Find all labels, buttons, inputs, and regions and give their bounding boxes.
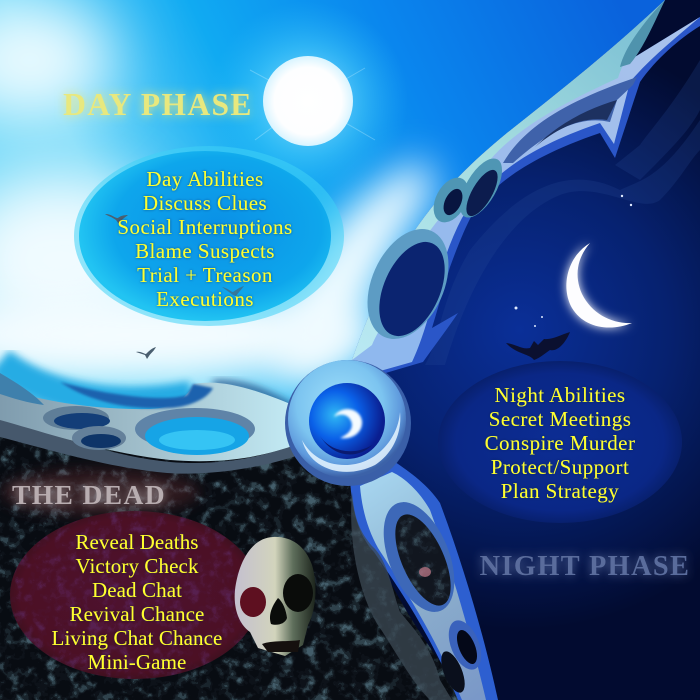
small openings [436,616,488,696]
dark slot [503,77,637,163]
text block: night phase list: Plan Strategy [501,479,619,503]
sun glow [228,18,394,182]
icon: skull [235,537,315,656]
stone band [0,383,300,461]
text block: night phase list: Conspire Murder [485,431,635,455]
text block: night phase list: Night Abilities [494,383,626,407]
text block: day phase list: Executions [156,287,254,311]
text block: the dead list: Living Chat Chance [52,626,222,650]
large opening [384,502,454,612]
small openings [426,152,510,228]
panel: day sky [0,0,700,420]
red haze behind heading [0,468,200,516]
text block: day phase list: Discuss Clues [143,191,267,215]
small opening [72,426,126,450]
text block: the dead list: Mini-Game [88,650,186,674]
stars [514,195,632,327]
text block: night phase list [485,383,635,503]
panel: day oval [74,146,344,326]
upper right arm of frame [345,0,700,385]
text block: the dead list: Revival Chance [70,602,204,626]
text block: the dead list: Victory Check [75,554,199,578]
heading: night phase: NIGHT PHASE [480,551,690,582]
red oval [10,511,248,679]
dark lower rim [0,416,300,474]
icon: sun [250,56,375,146]
stone shadow on left of arm [351,492,452,700]
central hub swirl [285,360,411,486]
cloud layers [0,0,435,390]
medium opening [43,406,110,430]
text block: day phase list: Blame Suspects [135,239,275,263]
upper shadowed slot [60,382,213,408]
cyan band above left arm [0,362,192,402]
mint outer blade [352,0,665,360]
text block: day phase list: Day Abilities [146,167,264,191]
far-left slot [0,373,44,405]
text block: the dead list: Reveal Deaths [75,530,199,554]
lower arm of frame [350,462,498,700]
panel: night phase oval [438,361,682,523]
text block: night phase list: Protect/Support [491,455,629,479]
heading: day phase: DAY PHASE [63,87,253,122]
icon: crescent moon [566,243,632,328]
big cyan opening [135,408,255,455]
text block: day phase list [117,167,293,311]
deep blue inner edge [345,0,700,385]
faint arm echoes in night sky [425,60,700,365]
pale blue body [348,0,700,380]
upper notch [620,0,665,67]
text block: day phase list: Trial + Treason [137,263,273,287]
large opening [352,216,464,352]
left arm of frame [0,373,300,474]
panel: the dead background [0,437,458,700]
text block: day phase list: Social Interruptions [117,215,293,239]
text block: night phase list: Secret Meetings [489,407,631,431]
text block: the dead list: Dead Chat [92,578,182,602]
icon: birds [105,214,244,359]
icon: night bat [506,332,570,360]
shadow above arm [213,384,292,408]
heading: the dead: THE DEAD [12,479,166,510]
text block: the dead list [52,530,222,674]
